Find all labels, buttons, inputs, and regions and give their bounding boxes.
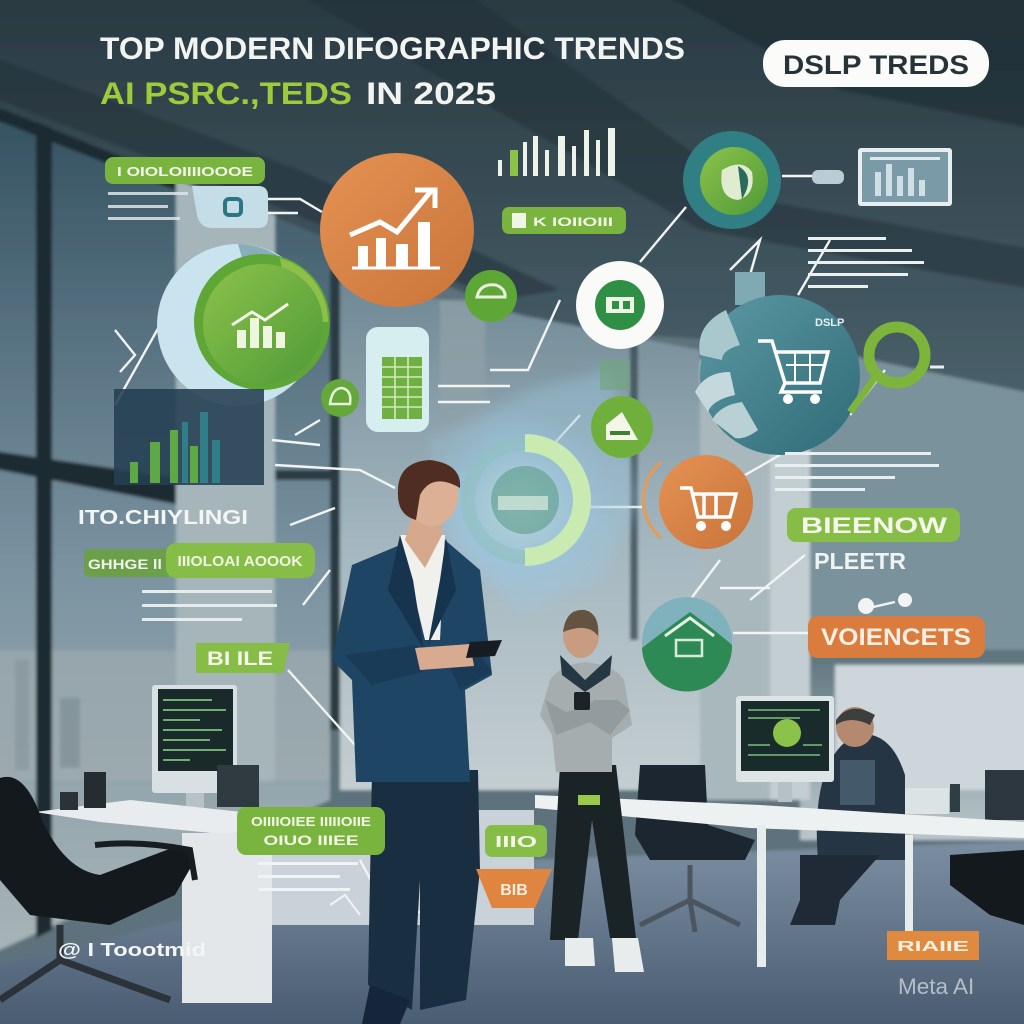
tag: center small labels: BIB	[500, 882, 528, 899]
tag: center small labels	[476, 825, 552, 908]
tag: top left green label	[105, 157, 265, 184]
text block: left small	[142, 590, 277, 621]
tag: bottom green block: OIIIIOIEE IIIIIOIIE	[251, 814, 371, 829]
small pin	[858, 593, 912, 614]
text block: right of top	[808, 237, 924, 288]
badge: DSLP TREDS: DSLP TREDS	[783, 50, 969, 80]
right desk workstation	[905, 770, 1024, 820]
icon: orange growth circle	[320, 153, 474, 307]
tag: top left green label: I OIOLOIIIIOOOE	[117, 164, 253, 179]
tag: center small labels: IIIO	[495, 834, 537, 851]
chair: foreground left	[0, 777, 195, 1000]
connector pill	[812, 170, 844, 184]
tag: green middle label	[502, 207, 626, 234]
icon: teal cart circle	[695, 272, 860, 455]
icon: teal-green circle top	[683, 131, 781, 229]
floor	[0, 840, 1024, 1024]
tag: green middle label: K IOIIOIII	[533, 215, 613, 229]
handle label: @ I Toootmid	[58, 940, 206, 960]
connector lines	[115, 176, 895, 745]
text block: right middle	[775, 452, 939, 491]
chart: top bars	[498, 128, 615, 176]
monitor left	[152, 685, 237, 811]
hologram	[425, 360, 640, 615]
panel: green phone card	[366, 327, 429, 432]
desk left	[35, 765, 534, 1003]
watermark: Meta AI	[898, 974, 974, 999]
title	[100, 30, 685, 111]
tag: bottom right orange: RIAIIE	[897, 938, 969, 955]
label: PLEETR: PLEETR	[814, 548, 906, 574]
text block: bottom	[258, 862, 360, 915]
mullions	[36, 122, 52, 938]
icon: green magnifier ring	[850, 327, 944, 412]
title: TOP MODERN DIFOGRAPHIC TRENDS	[100, 30, 685, 66]
badge: DSLP TREDS	[763, 40, 989, 87]
label: IT0 CHIVLING: ITO.CHIYLINGI	[78, 507, 248, 529]
monitor right	[736, 696, 834, 802]
far wall	[800, 345, 1024, 660]
icon: small green shield	[321, 379, 359, 417]
tag: BI ILE: BI ILE	[207, 649, 273, 670]
icon: green document circle	[591, 396, 653, 458]
tag: bottom green block	[237, 807, 385, 855]
tag: bottom green block: OIUO IIIEE	[264, 832, 358, 848]
person: woman in blazer	[332, 460, 502, 1024]
desk right	[535, 795, 1024, 967]
tag: left green labels	[84, 543, 315, 578]
icon: house circle	[642, 597, 732, 692]
tag: BIE NOW: BIEENOW	[801, 513, 947, 538]
tag: bottom right orange	[887, 931, 979, 960]
panel: tablet chart	[858, 148, 952, 206]
icon: teal cart circle: DSLP	[815, 317, 844, 329]
text block: under top left label	[108, 192, 188, 220]
tag: VOIENCETS: VOIENCETS	[821, 624, 971, 651]
connector: bottom elbow	[360, 860, 438, 912]
icon: white ring with green center	[576, 261, 664, 349]
icon: small green ring	[465, 270, 517, 322]
tag: BI ILE	[196, 643, 290, 673]
tag: left green labels: IIIOLOAI AOOOK	[178, 553, 303, 570]
windows left	[0, 100, 330, 968]
title: IN 2025	[366, 75, 496, 111]
chair: right edge	[950, 850, 1024, 925]
person: seated right	[790, 707, 905, 925]
person: standing middle	[540, 610, 644, 972]
tag: left green labels: GHHGE ll	[88, 556, 162, 572]
panel: left bar chart	[114, 389, 264, 485]
tag: BIE NOW	[787, 508, 960, 542]
icon: light card	[192, 186, 268, 228]
tag: VOIENCETS	[808, 616, 985, 658]
ceiling	[0, 0, 1024, 405]
icon: orange cart circle	[643, 455, 753, 549]
title: AI PSRC.,TEDS	[100, 75, 352, 111]
icon: donut chart left	[157, 244, 330, 406]
chair: middle right	[635, 765, 755, 932]
